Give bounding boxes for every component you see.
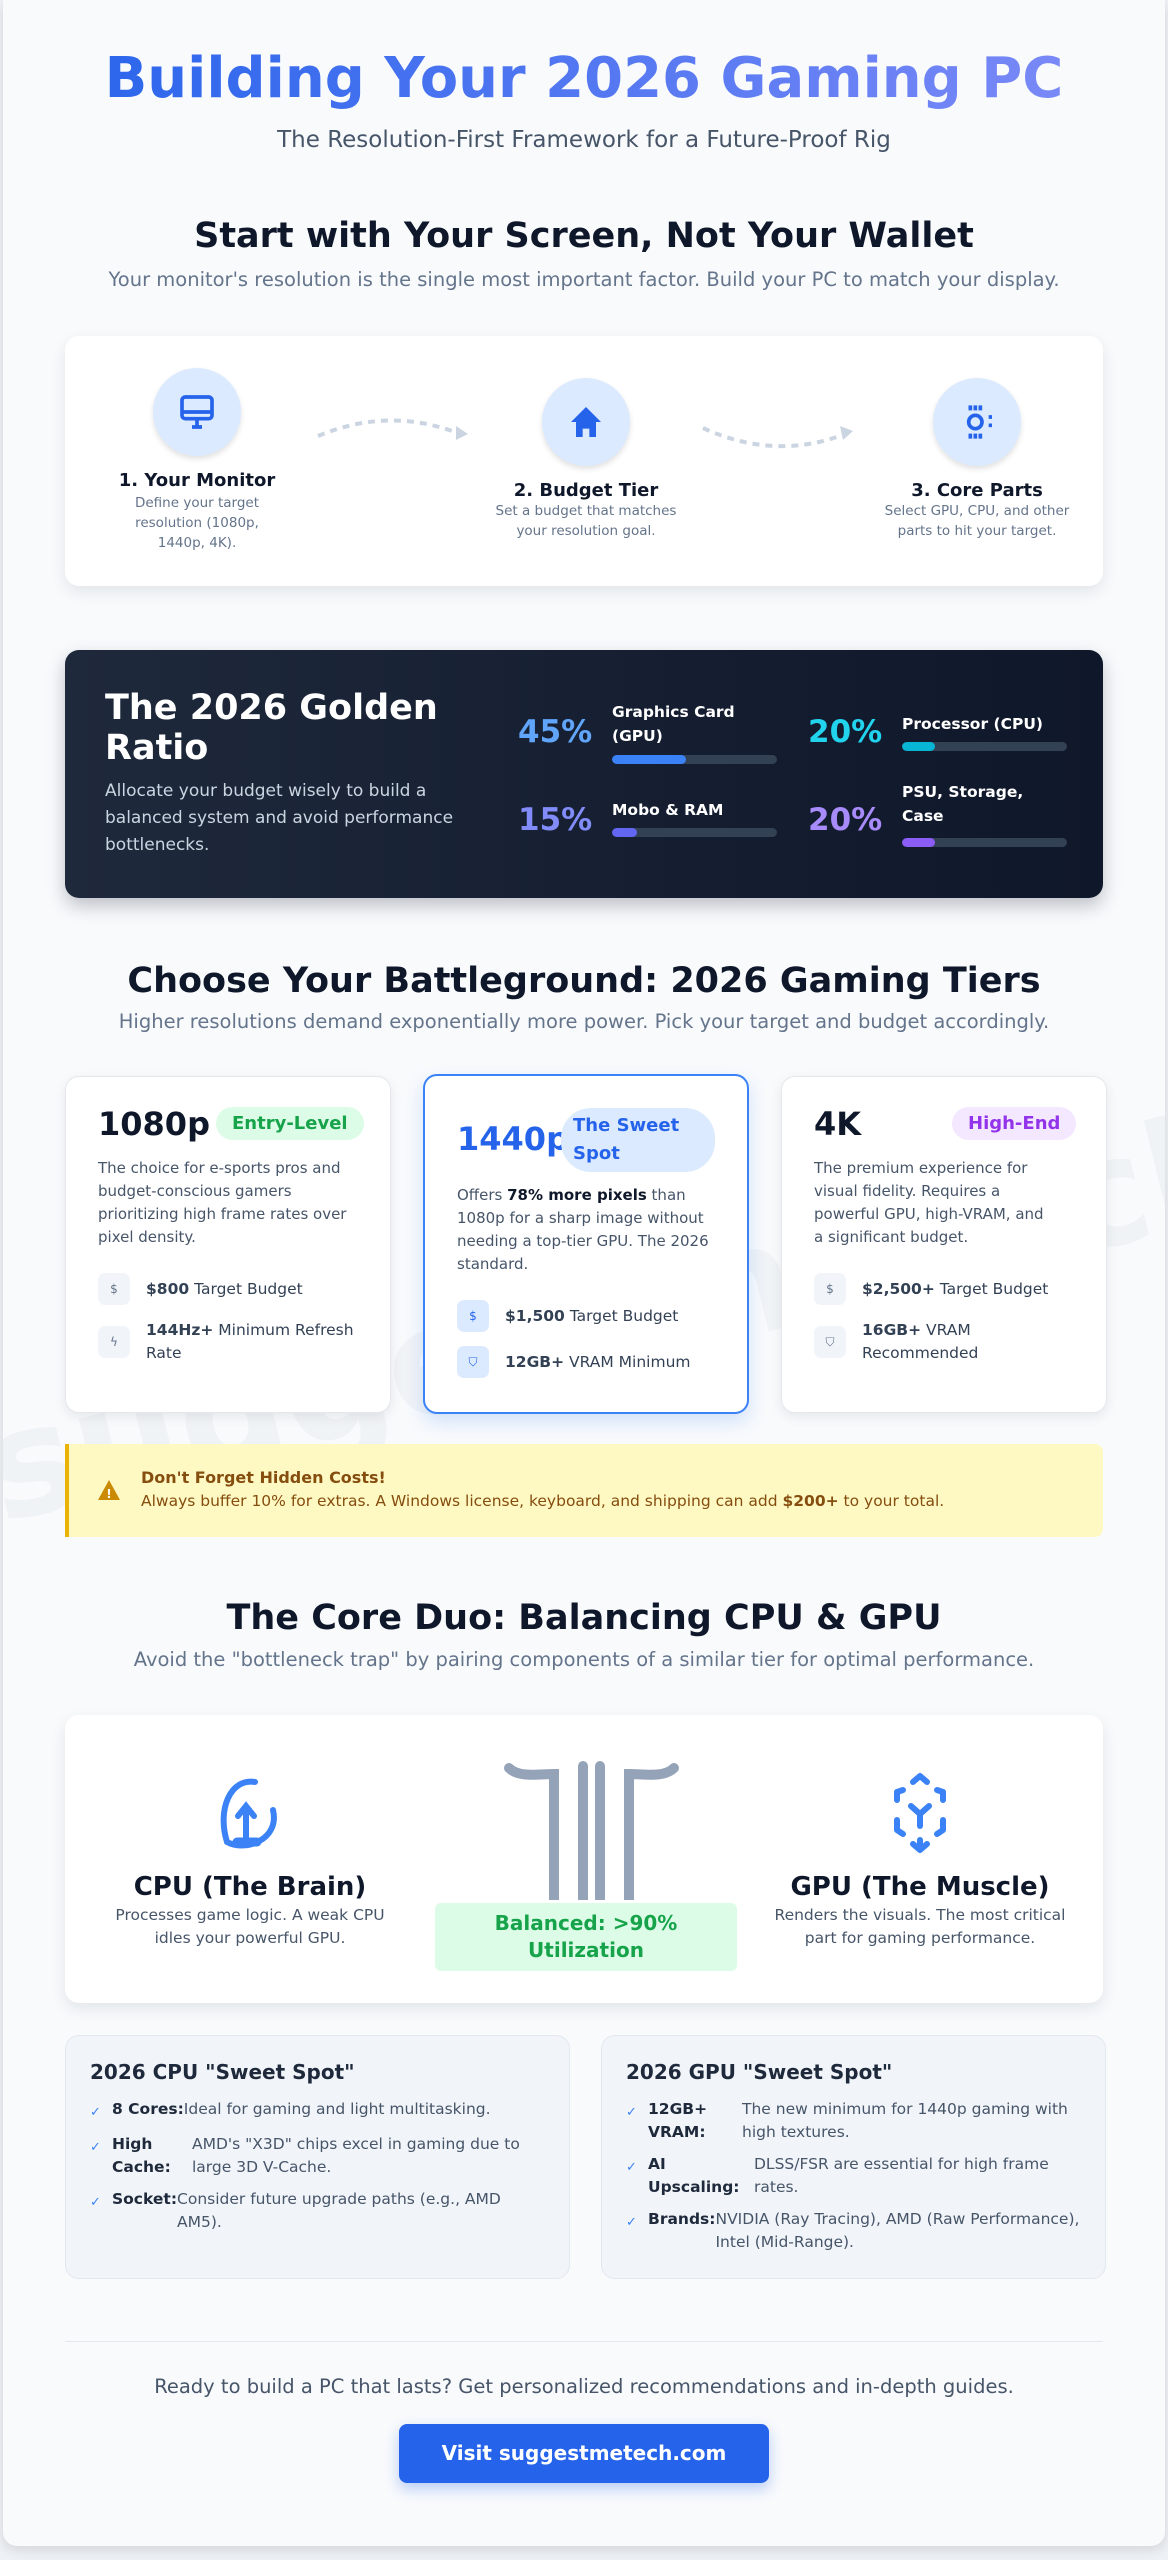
tier card: 4K: The premium experience for visual fidelity. Requires a powerful GPU, high-VRAM, and a significant budget. — [814, 1159, 1044, 1246]
step 3: Select GPU, CPU, and other parts to hit your target. — [885, 503, 1069, 539]
title: Building Your 2026 Gaming PC — [105, 46, 1063, 111]
stat: PSU 20%: Case — [902, 807, 944, 825]
feature budget: $800 Target Budget — [146, 1280, 303, 1298]
button: cta — [399, 2424, 769, 2483]
panel: cpu sweet spot: ✓ — [90, 2195, 101, 2210]
cpu block: CPU (The Brain) — [134, 1872, 366, 1902]
step 2: Set a budget that matches your resolution goal. — [496, 503, 676, 539]
icon: warning — [98, 1480, 120, 1501]
stat: Mobo 15%: Mobo & RAM — [612, 801, 723, 819]
icon: chip — [933, 378, 1021, 466]
heading: core duo: The Core Duo: Balancing CPU & GPU — [226, 1598, 942, 1638]
footer text: Ready to build a PC that lasts? Get personalized recommendations and in-depth guides. — [154, 2375, 1014, 2398]
icon: balance — [504, 1761, 679, 1900]
balanced label: Utilization — [528, 1938, 644, 1962]
step 2: 2. Budget Tier — [514, 480, 658, 501]
subheading tiers: Higher resolutions demand exponentially more power. Pick your target and budget accordingly. — [119, 1010, 1049, 1033]
balanced label — [435, 1903, 737, 1971]
stat: PSU 20%: PSU, Storage, — [902, 783, 1023, 801]
stat: GPU 45%: (GPU) — [612, 727, 663, 745]
panel: gpu sweet spot: The new minimum for 1440p gaming with high textures. — [742, 2100, 1068, 2141]
feature vram — [457, 1346, 691, 1378]
feature budget: $1,500 Target Budget — [505, 1306, 678, 1324]
subtitle: The Resolution-First Framework for a Future-Proof Rig — [277, 127, 891, 153]
callout: hidden costs: Always buffer 10% for extras. A Windows license, keyboard, and shipping can add $200+ to your total. — [141, 1492, 944, 1510]
tier card: 1440p: Offers 78% more pixels than 1080p for a sharp image without needing a top-tier GPU. The 2026 standard. — [457, 1186, 709, 1273]
stat: PSU 20%: 20% — [808, 802, 882, 838]
cpu block: Processes game logic. A weak CPU idles your powerful GPU. — [115, 1906, 385, 1947]
tier card: 1440p: 1440p — [457, 1120, 569, 1158]
gpu block — [774, 1772, 1066, 1947]
tier card: 4K: 4K — [814, 1105, 861, 1143]
feature refresh: ϟ — [110, 1334, 118, 1348]
panel: gpu sweet spot: ✓ — [626, 2160, 637, 2175]
subheading core duo: Avoid the "bottleneck trap" by pairing components of a similar tier for optimal performance. — [134, 1648, 1034, 1671]
panel: gpu sweet spot: NVIDIA (Ray Tracing), AMD (Raw Performance), Intel (Mid-Range). — [715, 2210, 1079, 2251]
panel: gpu sweet spot: 12GB+ VRAM: — [648, 2100, 707, 2141]
step 3 — [885, 378, 1070, 539]
panel: cpu sweet spot — [65, 2035, 570, 2279]
badge sweet spot: The Sweet Spot — [573, 1115, 679, 1164]
panel: gpu sweet spot — [601, 2035, 1106, 2279]
tier card: 1080p: 1080p — [98, 1105, 210, 1143]
panel: cpu sweet spot: Ideal for gaming and light multitasking. — [184, 2100, 491, 2118]
step 1: Define your target resolution (1080p, 1440p, 4K). — [135, 495, 259, 551]
gpu block: Renders the visuals. The most critical part for gaming performance. — [774, 1906, 1066, 1947]
badge high-end — [952, 1107, 1076, 1140]
icon: cpu brain — [220, 1778, 277, 1848]
step 1: 1. Your Monitor — [119, 470, 275, 491]
feature vram: 12GB+ VRAM Minimum — [505, 1352, 691, 1370]
balanced label: Balanced: >90% — [495, 1911, 677, 1935]
panel: cpu sweet spot: Socket: — [112, 2190, 177, 2208]
button: cta: Visit suggestmetech.com — [442, 2441, 726, 2465]
stat: CPU 20%: Processor (CPU) — [902, 715, 1043, 733]
panel: core duo — [65, 1715, 1103, 2003]
stat: Mobo 15% — [518, 801, 777, 838]
tier card: 4K — [781, 1076, 1107, 1413]
feature budget: $ — [826, 1282, 834, 1296]
icon: house — [542, 378, 630, 466]
feature refresh: 144Hz+ Minimum Refresh Rate — [146, 1321, 354, 1362]
feature vram: 16GB+ VRAM Recommended — [862, 1321, 978, 1362]
arrow 1 — [317, 418, 468, 440]
tier card: 1080p — [65, 1076, 391, 1413]
icon: gpu cube — [894, 1772, 946, 1854]
badge high-end: High-End — [968, 1113, 1060, 1134]
stat: GPU 45%: 45% — [518, 714, 592, 750]
tier card: 1440p — [423, 1074, 749, 1414]
panel: cpu sweet spot: 8 Cores: — [112, 2100, 184, 2118]
panel: gpu sweet spot: DLSS/FSR are essential for high frame rates. — [754, 2155, 1049, 2196]
panel: cpu sweet spot: Consider future upgrade paths (e.g., AMD AM5). — [177, 2190, 501, 2231]
feature budget — [457, 1300, 678, 1332]
panel: gpu sweet spot: Brands: — [648, 2210, 715, 2228]
golden ratio text: Allocate your budget wisely to build a balanced system and avoid performance bottlenecks. — [105, 781, 453, 855]
callout: hidden costs: Don't Forget Hidden Costs! — [141, 1468, 386, 1487]
panel: gpu sweet spot: ✓ — [626, 2105, 637, 2120]
cpu block — [115, 1778, 385, 1947]
panel: cpu sweet spot: AMD's "X3D" chips excel in gaming due to large 3D V-Cache. — [192, 2135, 520, 2176]
panel: steps — [65, 336, 1103, 586]
panel: cpu sweet spot: ✓ — [90, 2105, 101, 2120]
icon: warning: ! — [106, 1487, 112, 1501]
arrow 2 — [702, 426, 853, 448]
panel: cpu sweet spot: ✓ — [90, 2140, 101, 2155]
panel: cpu sweet spot: High Cache: — [112, 2135, 171, 2176]
tier card: 1080p: The choice for e-sports pros and budget-conscious gamers prioritizing high frame rates over pixel density. — [98, 1159, 346, 1246]
stat: GPU 45% — [518, 703, 777, 764]
step 3: 3. Core Parts — [911, 480, 1043, 501]
badge sweet spot — [561, 1108, 715, 1172]
panel: gpu sweet spot: 2026 GPU "Sweet Spot" — [626, 2060, 892, 2084]
step 1 — [119, 368, 276, 551]
stat: Mobo 15%: 15% — [518, 802, 592, 838]
panel: gpu sweet spot: ✓ — [626, 2215, 637, 2230]
stat: PSU 20% — [808, 783, 1067, 847]
badge entry — [216, 1107, 364, 1140]
stat: GPU 45%: Graphics Card — [612, 703, 735, 721]
callout: hidden costs — [65, 1444, 1103, 1537]
stat: CPU 20%: 20% — [808, 714, 882, 750]
feature budget — [98, 1273, 303, 1305]
badge entry: Entry-Level — [232, 1113, 348, 1134]
feature budget: $ — [469, 1308, 477, 1322]
feature budget: $2,500+ Target Budget — [862, 1280, 1048, 1298]
subheading: Your monitor's resolution is the single most important factor. Build your PC to match your display. — [108, 268, 1060, 291]
feature vram: ⛉ — [825, 1334, 834, 1348]
panel: golden ratio — [65, 650, 1103, 898]
panel: gpu sweet spot: AI Upscaling: — [648, 2155, 740, 2196]
feature budget — [814, 1273, 1048, 1305]
golden ratio title: The 2026 Golden Ratio — [105, 688, 438, 768]
gpu block: GPU (The Muscle) — [790, 1872, 1050, 1902]
icon: monitor — [153, 368, 241, 456]
panel: cpu sweet spot: 2026 CPU "Sweet Spot" — [90, 2060, 355, 2084]
heading: start with your screen: Start with Your Screen, Not Your Wallet — [194, 216, 974, 256]
step 2 — [496, 378, 676, 539]
feature vram: ⛉ — [468, 1354, 478, 1368]
stat: CPU 20% — [808, 714, 1067, 751]
feature budget: $ — [110, 1282, 118, 1296]
heading: tiers: Choose Your Battleground: 2026 Gaming Tiers — [127, 961, 1041, 1001]
